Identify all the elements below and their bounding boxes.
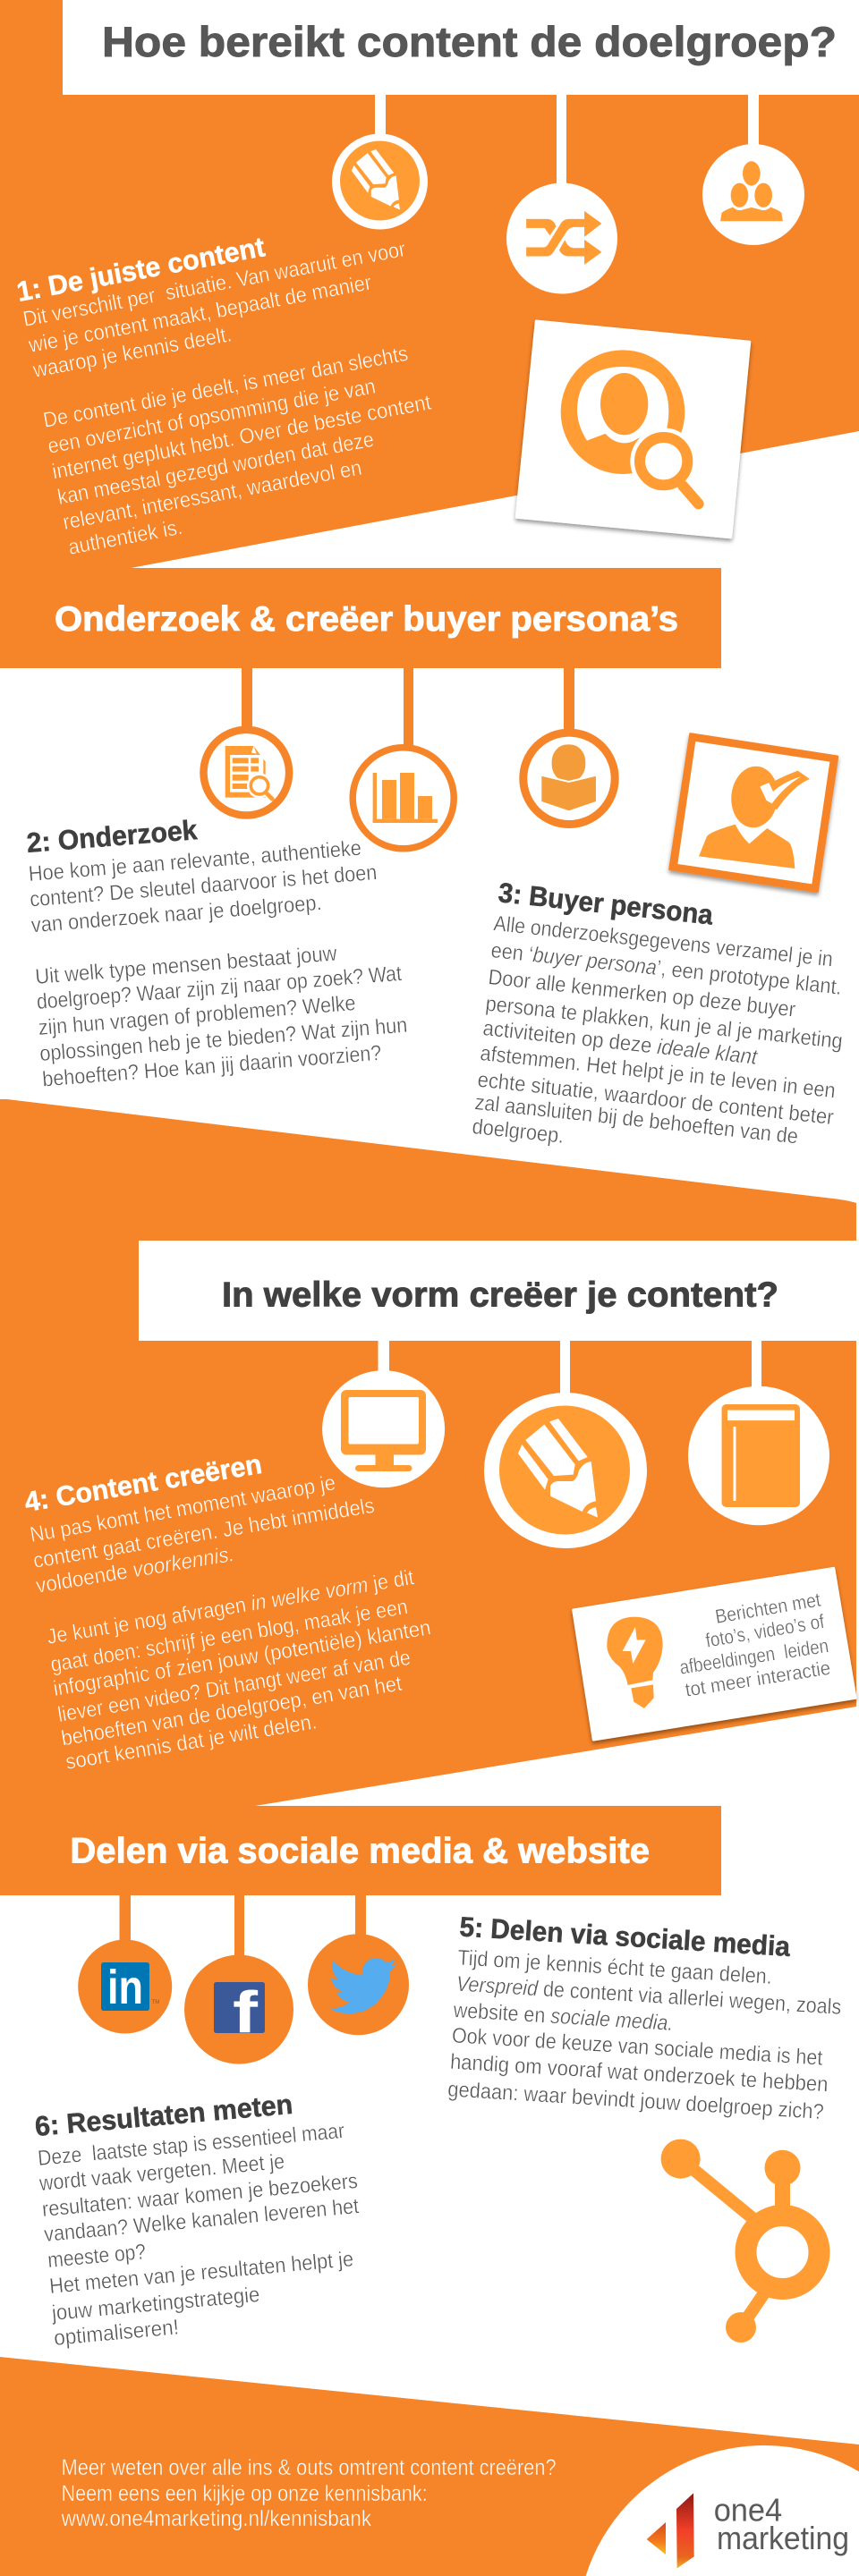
icon: facebook pin xyxy=(184,1895,293,2064)
text block: 1 de juiste content: kan meestal gezegd worden dat deze xyxy=(55,428,376,510)
text block: 1 de juiste content: 1: De juiste content xyxy=(14,231,268,308)
text block: 4 content creeren: behoeften van de doelgroep, en van het xyxy=(60,1672,404,1751)
title box xyxy=(63,0,859,95)
text block: 6 resultaten meten: jouw marketingstrategie xyxy=(50,2283,260,2326)
text block: 3 buyer persona: activiteiten op deze ideale klant xyxy=(481,1016,760,1070)
banner: onderzoek en buyer persona xyxy=(0,568,721,668)
text block: 5 delen via sociale media: Tijd om je kennis écht te gaan delen. xyxy=(457,1945,773,1989)
text block: 4 content creeren: Nu pas komt het moment waarop je xyxy=(28,1470,337,1547)
footer call to action text: Meer weten over alle ins & outs omtrent content creëren? xyxy=(62,2455,557,2480)
callout: tip card with lightbulb: foto’s, video’s of xyxy=(704,1610,827,1652)
footer call to action text: Neem eens een kijkje op onze kennisbank: xyxy=(62,2481,428,2506)
panel: section 3 - content creeren xyxy=(0,1099,856,1806)
text block: 4 content creeren: gaat doen: schrijf je een blog, maak je een xyxy=(49,1595,410,1677)
icon: people pin xyxy=(702,95,804,245)
panel: section 4 - delen en resultaten xyxy=(0,1806,842,2351)
text block: 4 content creeren: infographic of zien jouw (potentiële) klanten xyxy=(52,1615,432,1701)
title box section 3 xyxy=(139,1241,856,1341)
footer call to action text xyxy=(61,2455,557,2531)
text block: 4 content creeren xyxy=(22,1448,432,1775)
text block: 3 buyer persona xyxy=(471,877,844,1149)
banner: delen via sociale media xyxy=(0,1806,721,1895)
orange background section 3 xyxy=(0,1099,856,1806)
text block: 2 onderzoek: behoeften? Hoe kan jij daarin voorzien? xyxy=(41,1041,382,1092)
text block: 2 onderzoek: doelgroep? Waar zijn zij naar op zoek? Wat xyxy=(36,962,403,1014)
icon: linkedin pin xyxy=(78,1895,172,2034)
text block: 2 onderzoek: Hoe kom je aan relevante, authentieke xyxy=(28,836,362,886)
text block: 2 onderzoek xyxy=(25,814,408,1092)
icon: monitor pin xyxy=(322,1341,445,1487)
orange footer background xyxy=(0,2357,859,2576)
text block: 6 resultaten meten: Deze laatste stap is essentieel maar xyxy=(37,2119,345,2171)
text block: 3 buyer persona: zal aansluiten bij de behoeften van de xyxy=(473,1090,799,1149)
callout: tip card with lightbulb: Berichten met xyxy=(713,1589,822,1628)
icon: shuffle pin xyxy=(506,95,617,293)
text block: 5 delen via sociale media: gedaan: waar bevindt jouw doelgroep zich? xyxy=(447,2077,824,2124)
icon: linkedin pin: in xyxy=(107,1961,143,2014)
text block: 2 onderzoek: content? De sleutel daarvoor is het doen xyxy=(29,860,378,911)
text block: 4 content creeren: liever een video? Dit hangt weer af van de xyxy=(56,1646,412,1727)
icon: pencil pin xyxy=(332,95,428,229)
icon: bar chart pin xyxy=(353,668,454,849)
text block: 2 onderzoek: 2: Onderzoek xyxy=(25,814,199,859)
icon: facebook pin: f xyxy=(233,1979,259,2046)
text block: 6 resultaten meten: optimaliseren! xyxy=(53,2315,180,2351)
text block: 1 de juiste content: Dit verschilt per situatie. Van waaruit en voor xyxy=(21,237,407,332)
text block: 6 resultaten meten: wordt vaak vergeten. Meet je xyxy=(38,2149,285,2196)
text block: 2 onderzoek: zijn hun vragen of problemen? Welke xyxy=(38,991,356,1040)
title box: Hoe bereikt content de doelgroep? xyxy=(102,18,837,65)
icon: reader pin xyxy=(523,668,615,825)
text block: 5 delen via sociale media: website en sociale media. xyxy=(452,1998,674,2036)
text block: 1 de juiste content: De content die je deelt, is meer dan slechts xyxy=(41,342,410,433)
text block: 1 de juiste content: waarop je kennis deelt. xyxy=(30,322,234,383)
logo: one4marketing: one4 xyxy=(714,2491,782,2528)
icon: hubspot sprocket xyxy=(661,2140,820,2343)
text block: 4 content creeren: voldoende voorkennis. xyxy=(34,1542,236,1598)
text block: 5 delen via sociale media: Ook voor de keuze van sociale media is het xyxy=(451,2023,823,2071)
banner: onderzoek en buyer persona: Onderzoek & creëer buyer persona’s xyxy=(55,600,678,639)
text block: 4 content creeren: 4: Content creëren xyxy=(22,1448,264,1518)
panel: section 1 - de juiste content xyxy=(0,0,859,569)
text block: 5 delen via sociale media xyxy=(447,1911,842,2124)
text block: 3 buyer persona: echte situatie, waardoor de content beter xyxy=(476,1068,835,1130)
text block: 3 buyer persona: 3: Buyer persona xyxy=(497,877,715,931)
text block: 5 delen via sociale media: 5: Delen via sociale media xyxy=(459,1911,792,1962)
text block: 6 resultaten meten: resultaten: waar komen je bezoekers xyxy=(41,2169,359,2222)
banner: delen via sociale media: Delen via sociale media & website xyxy=(70,1832,650,1871)
panel: footer xyxy=(0,2357,859,2576)
icon: lightbulb xyxy=(607,1617,663,1708)
icon: twitter pin xyxy=(308,1895,409,2035)
text block: 3 buyer persona: doelgroep. xyxy=(471,1114,566,1148)
text block: 2 onderzoek: van onderzoek naar je doelgroep. xyxy=(30,891,322,937)
callout: tip card with lightbulb xyxy=(574,1568,855,1740)
text block: 1 de juiste content xyxy=(14,231,433,560)
text block: 2 onderzoek: Uit welk type mensen bestaat jouw xyxy=(34,941,338,989)
text block: 1 de juiste content: relevant, interessant, waardevol en xyxy=(61,456,363,535)
logo: one4marketing xyxy=(586,2445,859,2576)
title box section 3: In welke vorm creëer je content? xyxy=(222,1275,778,1315)
panel: section 2 - onderzoek en buyer persona xyxy=(0,568,844,1149)
logo: one4marketing: marketing xyxy=(717,2520,849,2556)
text block: 1 de juiste content: wie je content maakt, bepaalt de manier xyxy=(26,270,373,358)
text block: 3 buyer persona: een ‘buyer persona’, een prototype klant. xyxy=(489,938,843,1000)
text block: 2 onderzoek: oplossingen heb je te bieden? Wat zijn hun xyxy=(38,1013,408,1066)
text block: 6 resultaten meten: 6: Resultaten meten xyxy=(34,2089,294,2142)
text block: 1 de juiste content: authentiek is. xyxy=(66,515,184,560)
footer call to action text: www.one4marketing.nl/kennisbank xyxy=(61,2506,372,2531)
text block: 6 resultaten meten xyxy=(34,2089,360,2351)
card: buyer persona check icon xyxy=(670,734,838,892)
text block: 1 de juiste content: een overzicht of opsomming die je van xyxy=(46,375,378,459)
card: person search icon xyxy=(516,321,750,538)
callout: tip card with lightbulb: tot meer interactie xyxy=(684,1657,832,1701)
text block: 6 resultaten meten: Het meten van je resultaten helpt je xyxy=(48,2247,354,2299)
text block: 4 content creeren: soort kennis dat je wilt delen. xyxy=(64,1709,319,1775)
text block: 6 resultaten meten: meeste op? xyxy=(47,2240,147,2273)
text block: 4 content creeren: Je kunt je nog afvragen in welke vorm je dit xyxy=(46,1565,416,1649)
callout: tip card with lightbulb: afbeeldingen leiden xyxy=(678,1634,830,1679)
text block: 6 resultaten meten: vandaan? Welke kanalen leveren het xyxy=(43,2194,360,2247)
icon: book pin xyxy=(688,1341,829,1525)
icon: large pencil pin xyxy=(484,1341,647,1548)
text block: 3 buyer persona: Door alle kenmerken op deze buyer xyxy=(487,965,796,1022)
icon: spreadsheet search pin xyxy=(203,668,289,816)
text block: 5 delen via sociale media: handig om vooraf wat onderzoek te hebben xyxy=(449,2050,829,2097)
text block: 1 de juiste content: internet geplukt hebt. Over de beste content xyxy=(50,390,433,484)
orange background section 1 xyxy=(0,0,859,569)
text block: 4 content creeren: content gaat creëren. Je hebt inmiddels xyxy=(31,1494,376,1573)
icon: linkedin pin: TM xyxy=(152,2000,159,2005)
